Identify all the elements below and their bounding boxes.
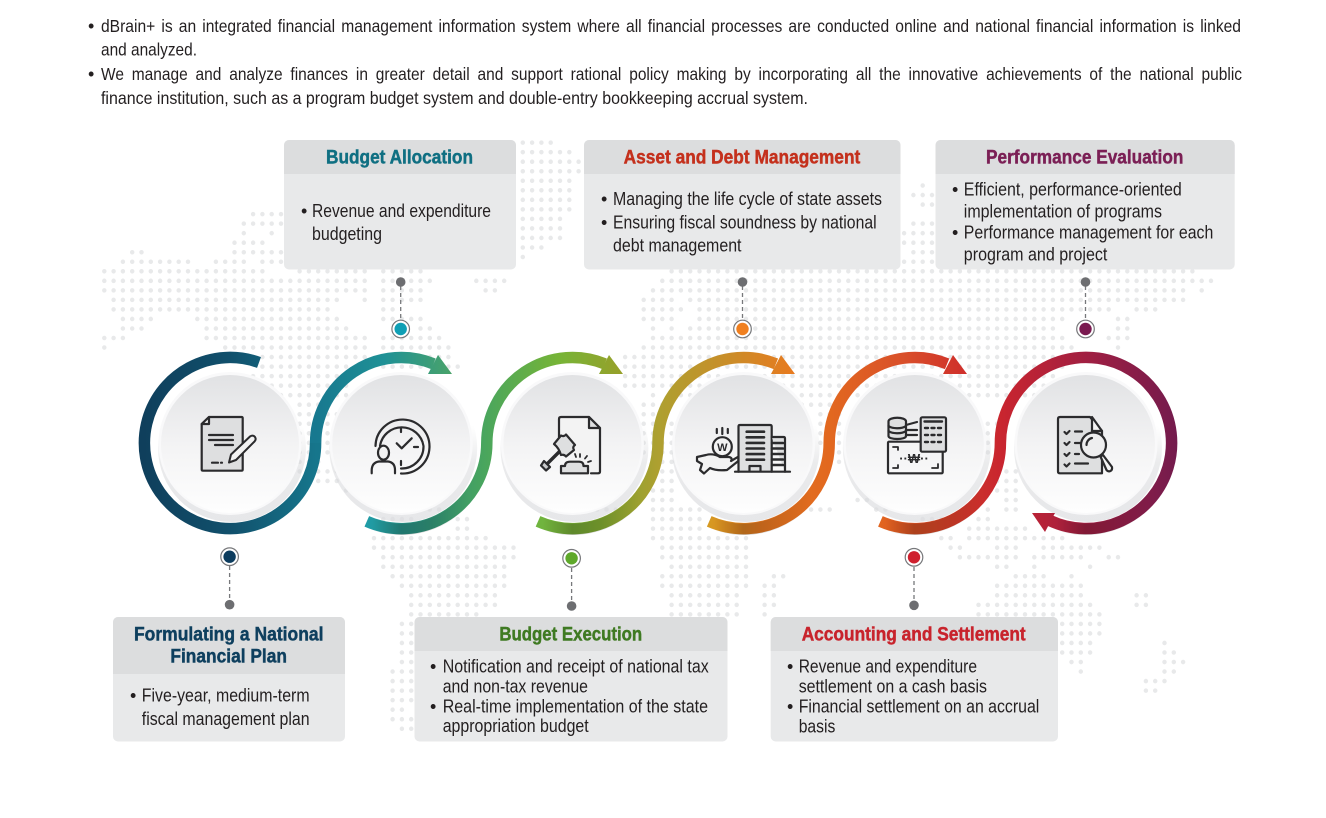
body text: • xyxy=(601,189,607,209)
body text: Financial settlement on an accrual xyxy=(799,696,1039,717)
intro text: • xyxy=(88,16,94,36)
ring segment 3 with arrow xyxy=(367,355,623,529)
ring segment 6 with return arrow xyxy=(880,357,1172,532)
intro text xyxy=(88,16,1242,108)
body text: and non-tax revenue xyxy=(443,676,588,697)
icon: document with pen xyxy=(202,417,256,471)
body text: Performance management for each xyxy=(964,222,1213,243)
ring segment 1: national plan xyxy=(144,357,316,529)
heading: Budget Allocation xyxy=(326,147,473,168)
body text: • xyxy=(952,223,958,243)
icon: coins, calculator and banknote xyxy=(888,417,946,473)
panel: Budget Execution xyxy=(414,617,728,742)
ring segment 4 with arrow xyxy=(538,355,795,529)
body text: • xyxy=(787,657,793,677)
panel: Formulating a National Financial Plan xyxy=(113,617,345,742)
body text: Efficient, performance-oriented xyxy=(964,179,1182,200)
heading: Budget Execution xyxy=(499,625,642,646)
body text: • xyxy=(430,697,436,717)
ring segment 2 with arrow xyxy=(316,355,452,443)
icon: coins, calculator and banknote: ··₩·· xyxy=(899,451,929,466)
body text: Real-time implementation of the state xyxy=(443,696,708,717)
body text: • xyxy=(952,180,958,200)
body text: basis xyxy=(799,716,835,737)
heading: Accounting and Settlement xyxy=(802,625,1026,646)
body text xyxy=(787,656,1039,737)
body text: settlement on a cash basis xyxy=(799,676,987,697)
body text: appropriation budget xyxy=(443,715,589,736)
body text: program and project xyxy=(964,244,1107,265)
connector: Asset and Debt pin xyxy=(734,277,751,338)
body text: • xyxy=(301,201,307,221)
connector: Accounting and Settlement pin xyxy=(905,548,923,610)
panel: Asset and Debt Management xyxy=(584,140,900,270)
heading xyxy=(134,625,324,668)
body text: budgeting xyxy=(312,223,382,244)
intro text: and analyzed. xyxy=(101,40,197,60)
panel: Performance Evaluation xyxy=(936,140,1235,270)
disc shadows xyxy=(158,374,1162,522)
connector: Budget Execution pin xyxy=(563,550,580,611)
body text: implementation of programs xyxy=(964,200,1162,221)
body text: Managing the life cycle of state assets xyxy=(613,188,882,209)
body text xyxy=(952,179,1213,265)
body text: fiscal management plan xyxy=(142,708,310,729)
white discs xyxy=(158,372,1158,515)
icon: hand, won coin and buildings xyxy=(697,425,790,474)
body text: • xyxy=(430,657,436,677)
heading: Asset and Debt Management xyxy=(624,147,861,168)
body text: Five-year, medium-term xyxy=(142,685,310,706)
heading: Performance Evaluation xyxy=(986,147,1183,168)
icon: clock and person xyxy=(372,420,429,474)
icon: gavel and document xyxy=(541,417,600,473)
body text: • xyxy=(130,686,136,706)
body text xyxy=(130,685,310,729)
body text: Revenue and expenditure xyxy=(799,656,977,677)
connector: Performance Evaluation pin xyxy=(1077,277,1094,338)
body text xyxy=(430,656,709,736)
body text: • xyxy=(787,697,793,717)
intro text: finance institution, such as a program budget system and double-entry bookkeeping accrual system. xyxy=(101,88,808,108)
body text: Ensuring fiscal soundness by national xyxy=(613,212,877,233)
body text xyxy=(601,188,882,256)
dotted world map background xyxy=(104,143,1212,729)
icon: checklist with magnifier xyxy=(1058,417,1112,473)
connector: Budget Allocation pin xyxy=(392,277,410,338)
panel: Budget Allocation xyxy=(284,140,516,270)
body text: Notification and receipt of national tax xyxy=(443,656,709,677)
panel: Accounting and Settlement xyxy=(771,617,1058,742)
serpentine arrow ribbon xyxy=(144,355,1172,532)
connector: National Financial Plan pin xyxy=(221,548,238,610)
body text: debt management xyxy=(613,235,742,256)
ring segment 5 with arrow xyxy=(709,355,967,529)
icon: hand, won coin and buildings: W xyxy=(717,442,728,454)
heading: Financial Plan xyxy=(170,647,287,668)
ribbon shading xyxy=(372,495,1154,529)
heading: Formulating a National xyxy=(134,625,324,646)
intro text: • xyxy=(88,64,94,84)
body text: Revenue and expenditure xyxy=(312,200,491,221)
body text: • xyxy=(601,213,607,233)
body text xyxy=(301,200,491,244)
